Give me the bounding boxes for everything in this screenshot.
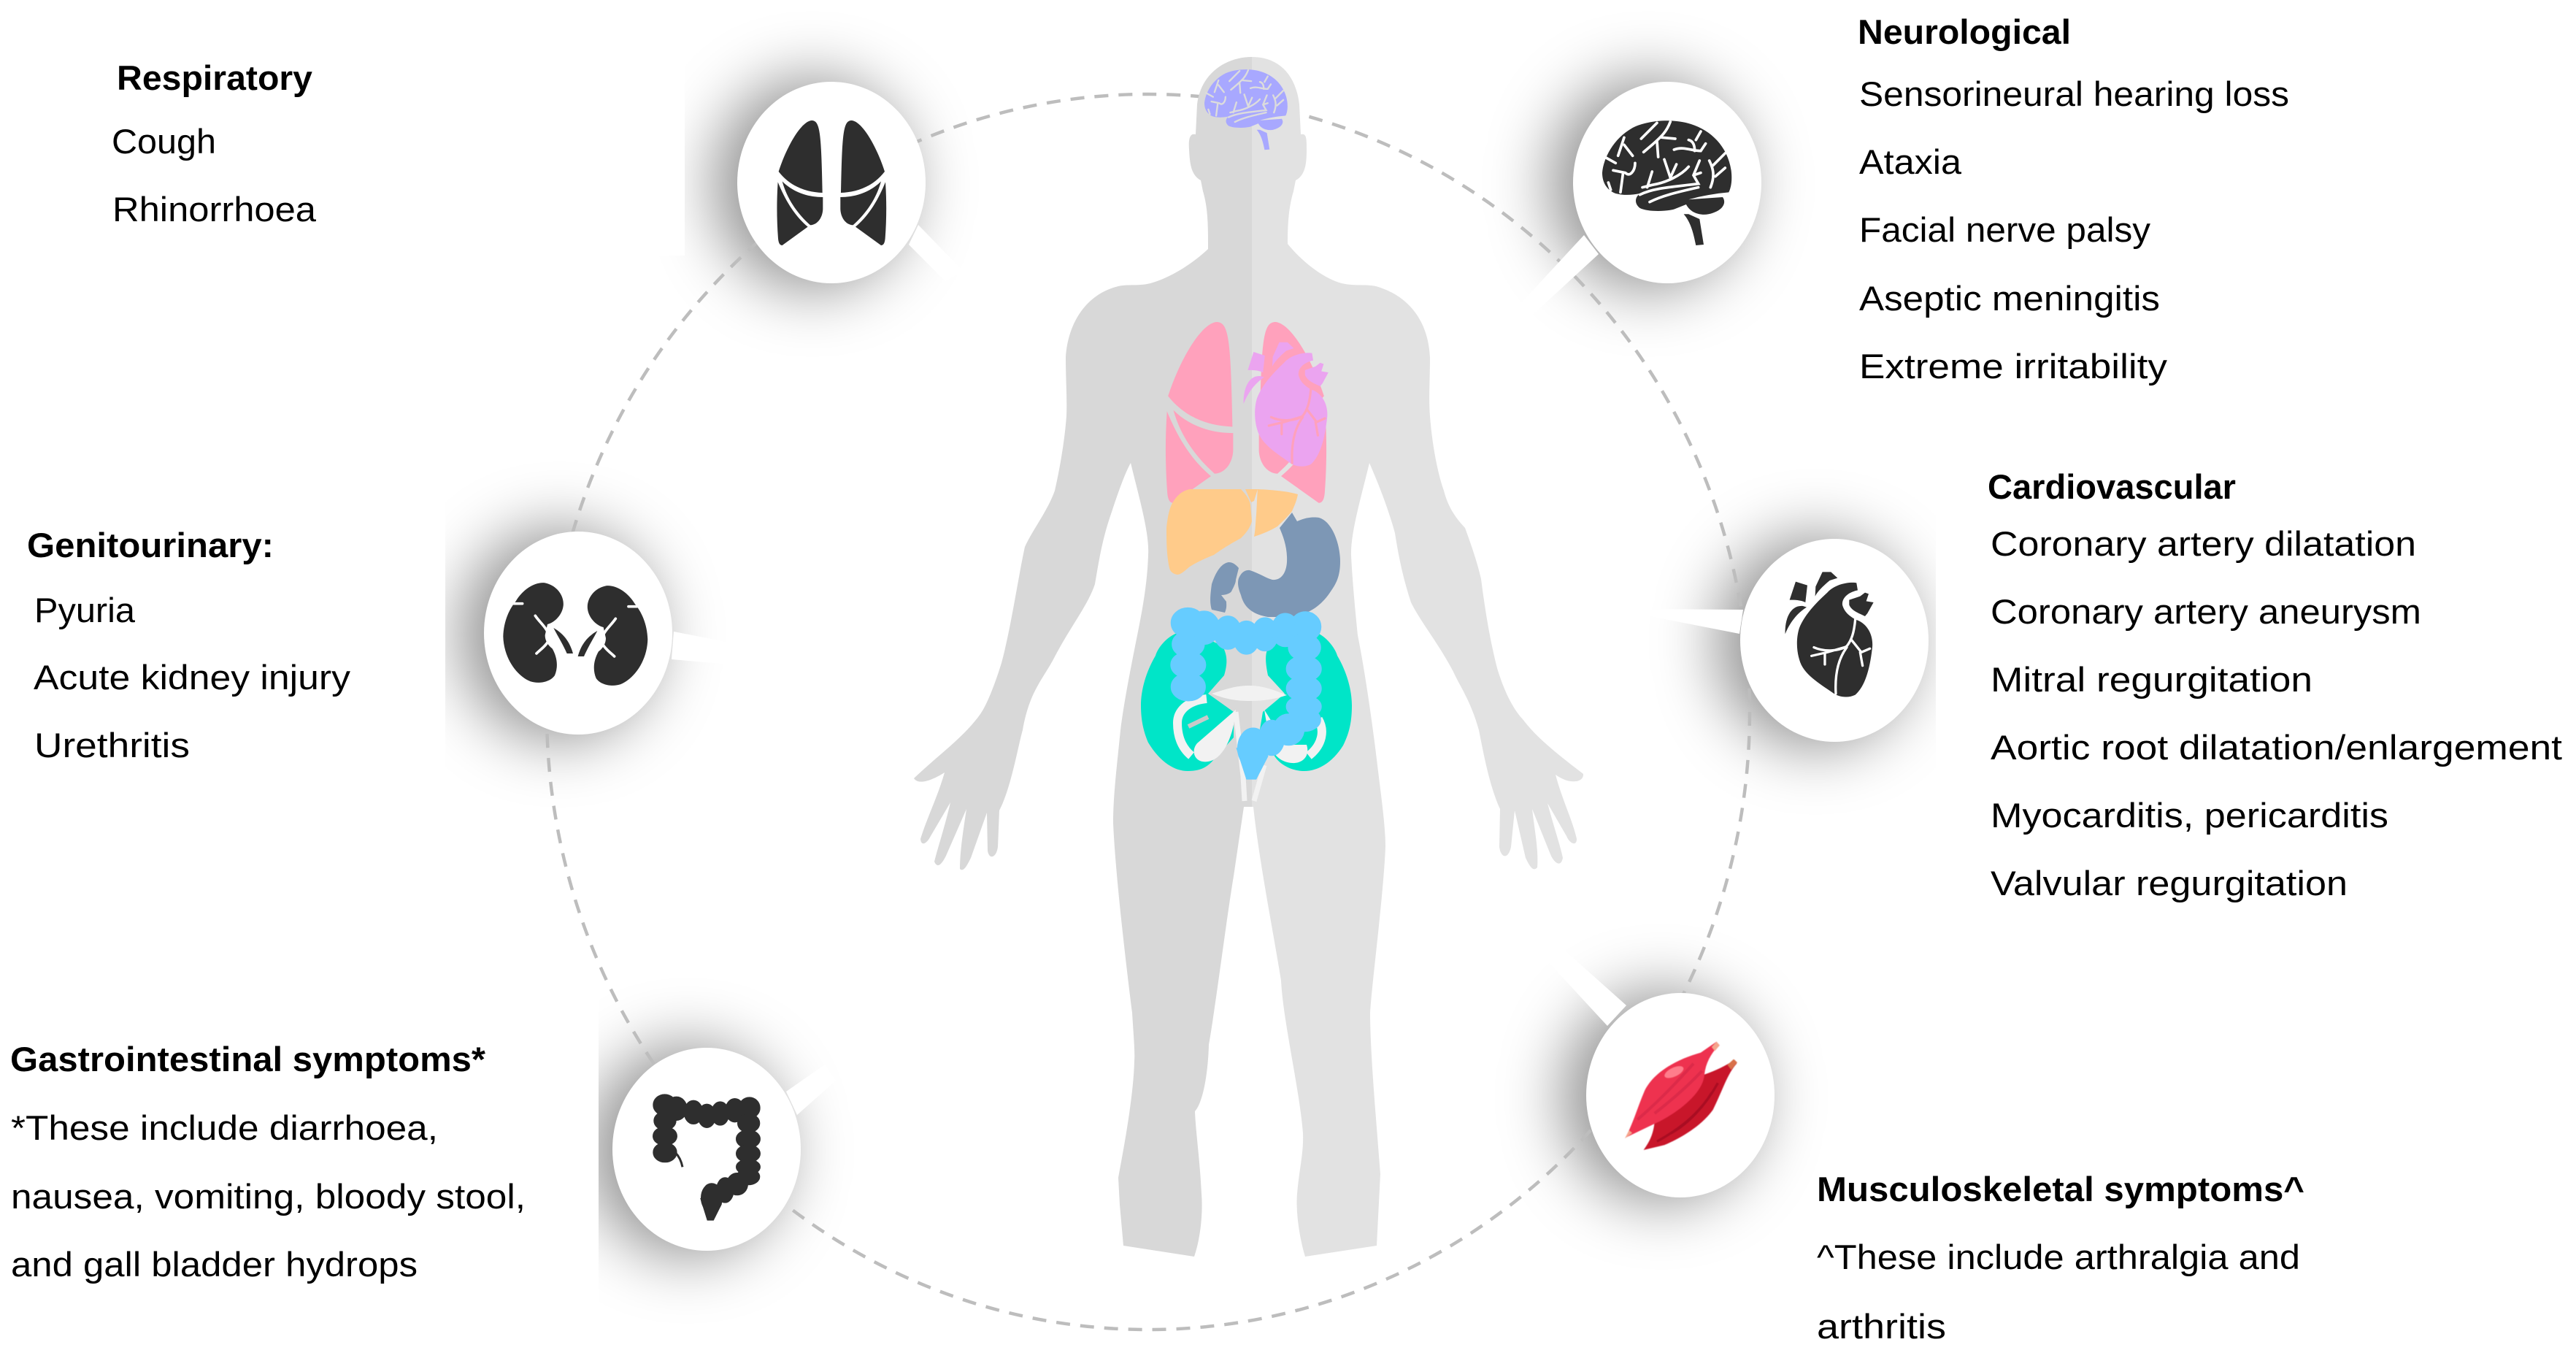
text block: cardiovascular: Coronary artery dilatation <box>1991 525 2416 564</box>
text block: musculoskeletal <box>1817 1170 2304 1346</box>
text block: musculoskeletal: ^These include arthralgia and <box>1817 1238 2300 1277</box>
text block: cardiovascular: Coronary artery aneurysm <box>1991 593 2421 632</box>
organ: heart on body <box>1244 342 1329 467</box>
text block: respiratory: Rhinorrhoea <box>112 191 317 229</box>
text block: cardiovascular <box>1988 468 2562 903</box>
organ: colon on body <box>1173 610 1319 777</box>
heading: musculoskeletal: Musculoskeletal symptoms^ <box>1817 1170 2304 1209</box>
text block: gastrointestinal: nausea, vomiting, bloody stool, <box>11 1178 526 1216</box>
organ: pelvic structures on body <box>1177 686 1322 801</box>
organ: brain on head <box>1204 69 1288 150</box>
organ: liver on body <box>1166 489 1298 575</box>
text block: gastrointestinal: and gall bladder hydrops <box>11 1246 418 1284</box>
heading: cardiovascular: Cardiovascular <box>1988 468 2236 507</box>
icon: lungs <box>777 120 886 245</box>
text block: neurological: Facial nerve palsy <box>1859 211 2150 250</box>
bubble: gastrointestinal <box>612 1048 836 1251</box>
bubble: respiratory <box>737 82 964 283</box>
text block: neurological: Aseptic meningitis <box>1859 280 2160 318</box>
text block: gastrointestinal <box>10 1040 526 1284</box>
icon: brain <box>1602 120 1731 245</box>
text block: neurological <box>1858 13 2289 386</box>
bubble: neurological <box>1511 82 1761 321</box>
body figure <box>914 57 1583 1257</box>
text block: neurological: Sensorineural hearing loss <box>1859 75 2289 114</box>
text block: cardiovascular: Mitral regurgitation <box>1991 661 2312 699</box>
bubble: genitourinary <box>484 532 730 735</box>
bubble drop shadows <box>460 77 1915 1257</box>
organ: lungs on body <box>1166 322 1326 503</box>
icon: heart <box>1785 572 1874 697</box>
bubble: cardiovascular <box>1617 539 1929 742</box>
text block: genitourinary <box>27 526 350 765</box>
text block: cardiovascular: Myocarditis, pericarditis <box>1991 797 2388 835</box>
heading: gastrointestinal: Gastrointestinal symptoms* <box>10 1040 486 1079</box>
organ: kidneys on body <box>1141 634 1352 771</box>
text block: genitourinary: Urethritis <box>34 726 190 765</box>
icon: kidneys <box>503 583 647 686</box>
heading: respiratory: Respiratory <box>117 59 313 98</box>
text block: cardiovascular: Valvular regurgitation <box>1991 864 2348 903</box>
heading: neurological: Neurological <box>1858 13 2071 52</box>
text block: neurological: Extreme irritability <box>1859 348 2167 386</box>
text block: respiratory <box>112 59 317 229</box>
text block: genitourinary: Pyuria <box>34 591 136 630</box>
icon: muscle <box>1625 1042 1737 1150</box>
text block: respiratory: Cough <box>112 123 216 161</box>
heading: genitourinary: Genitourinary: <box>27 526 274 565</box>
dashed orbit ring <box>547 94 1750 1330</box>
organ: stomach on body <box>1210 513 1340 617</box>
text block: musculoskeletal: arthritis <box>1817 1308 1946 1346</box>
text block: genitourinary: Acute kidney injury <box>34 659 350 697</box>
text block: gastrointestinal: *These include diarrhoea, <box>11 1109 438 1148</box>
icon: colon <box>654 1095 759 1219</box>
text block: cardiovascular: Aortic root dilatation/enlargement <box>1991 729 2562 767</box>
bubble: musculoskeletal <box>1537 938 1775 1197</box>
text block: neurological: Ataxia <box>1859 143 1962 182</box>
